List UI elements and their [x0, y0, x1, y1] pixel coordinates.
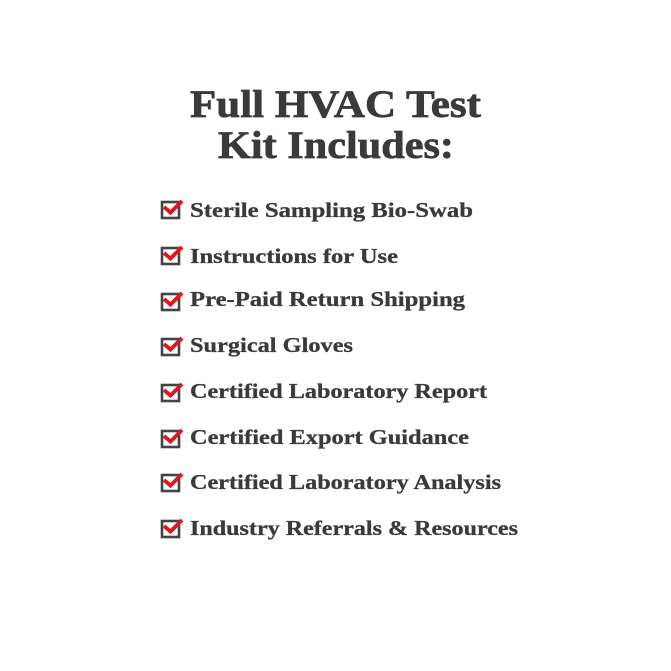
item: Certified Laboratory Report: Certified Laboratory Report	[190, 379, 487, 403]
item: Sterile Sampling Bio-Swab: Sterile Sampling Bio-Swab	[190, 198, 473, 222]
title: Kit Includes:	[218, 124, 454, 167]
title	[190, 83, 481, 167]
item: Surgical Gloves: Surgical Gloves	[190, 333, 353, 357]
item: Pre-Paid Return Shipping: Pre-Paid Return Shipping	[190, 287, 466, 311]
checklist	[162, 198, 518, 540]
item: Certified Export Guidance: Certified Export Guidance	[190, 425, 469, 449]
item: Industry Referrals & Resources: Industry Referrals & Resources	[190, 516, 518, 540]
item: Instructions for Use: Instructions for Use	[190, 244, 398, 268]
item: Certified Laboratory Analysis: Certified Laboratory Analysis	[190, 470, 501, 494]
title: Full HVAC Test	[190, 83, 481, 126]
